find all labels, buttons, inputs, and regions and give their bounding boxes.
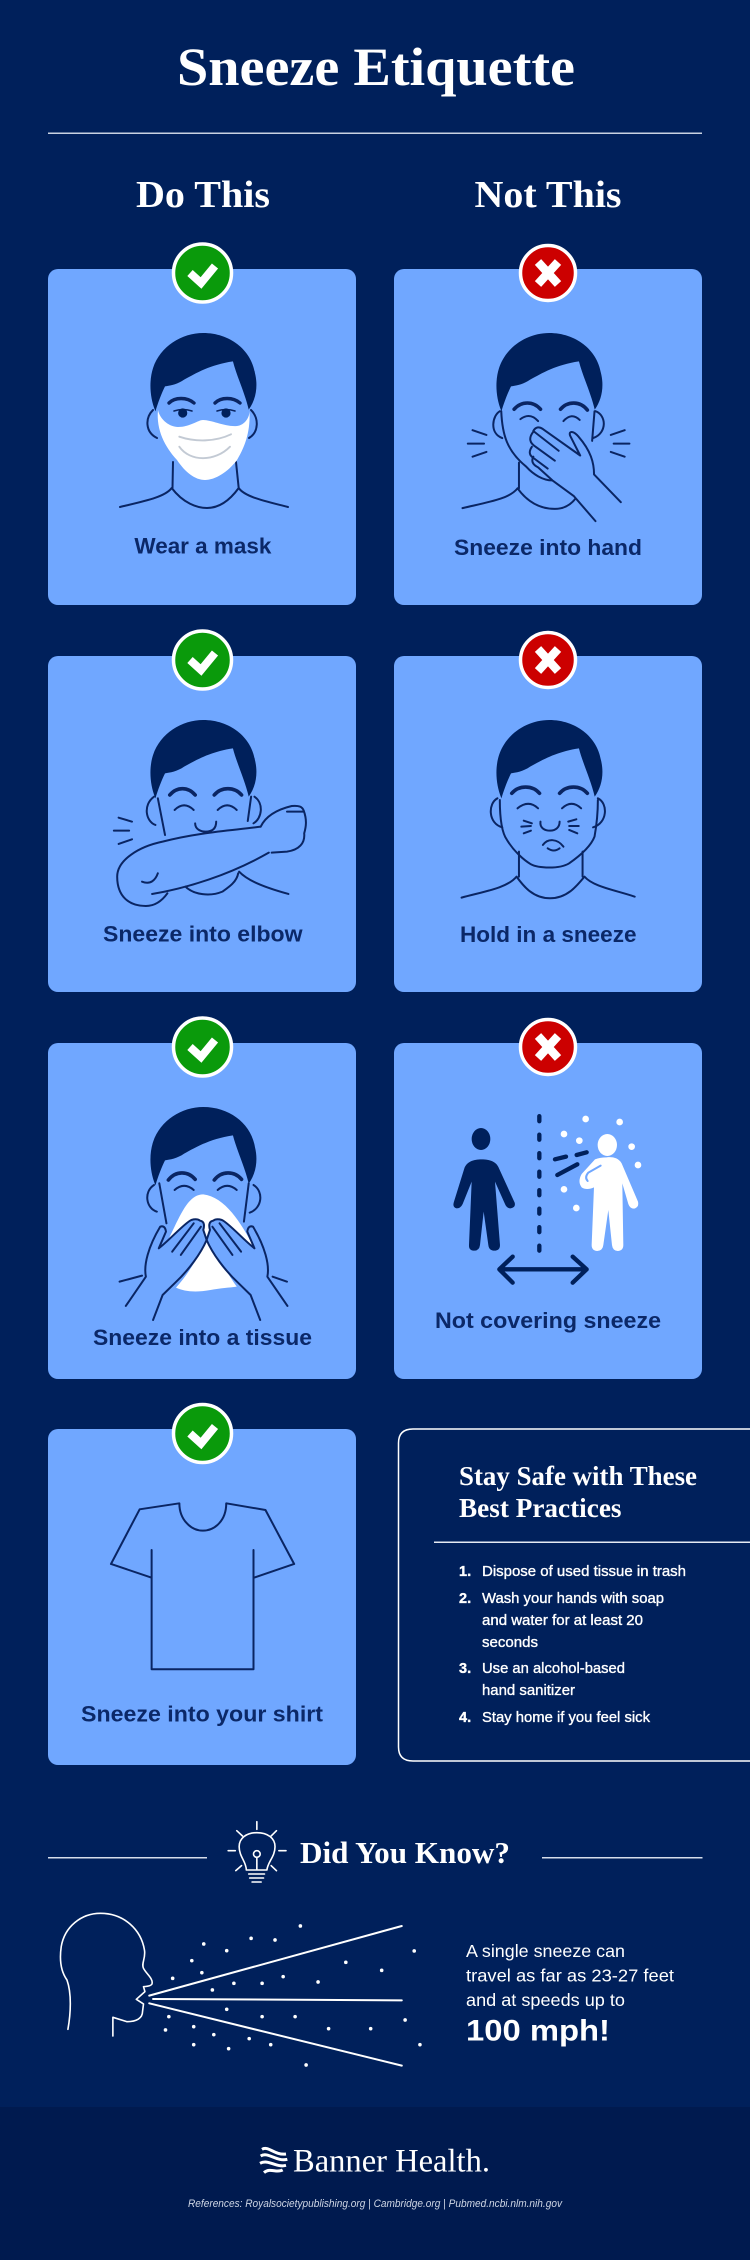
card background <box>48 1429 356 1765</box>
icon: red x badge <box>520 246 576 300</box>
illustration: people with spray and distance arrow <box>453 1116 638 1283</box>
panel: sneeze into a tissue <box>48 1018 356 1379</box>
label: Sneeze into a tissue <box>93 1325 312 1350</box>
card background <box>394 656 702 992</box>
arrow: double-headed distance <box>499 1257 587 1283</box>
card background <box>48 1043 356 1379</box>
spray lines <box>149 1926 402 2066</box>
heading <box>459 1461 697 1523</box>
droplets <box>564 1119 638 1208</box>
numbered list: seconds <box>482 1635 538 1651</box>
numbered list: Use an alcohol-based <box>482 1661 625 1677</box>
label: Wear a mask <box>134 534 272 558</box>
heading: Stay Safe with These <box>459 1461 697 1491</box>
panel: sneeze into your shirt <box>48 1404 356 1765</box>
illustration: man sneezing into hand <box>463 333 629 521</box>
numbered list: 3. <box>459 1661 471 1677</box>
illustration: t-shirt <box>111 1503 294 1669</box>
heading: Not This: Not This <box>474 174 622 216</box>
logo text: Banner Health. <box>293 2144 490 2180</box>
icon: green check badge <box>174 631 232 689</box>
numbered list: Wash your hands with soap <box>482 1591 664 1607</box>
numbered list: Dispose of used tissue in trash <box>482 1564 686 1580</box>
panel: wear a mask <box>48 244 356 605</box>
icon: red x badge <box>520 1020 576 1074</box>
card background <box>394 269 702 605</box>
numbered list <box>459 1564 686 1726</box>
panel: best practices <box>398 1429 750 1761</box>
illustration: man sneezing into elbow <box>114 720 306 906</box>
text: sneeze fact: 100 mph! <box>466 2014 610 2048</box>
numbered list: and water for at least 20 <box>482 1613 643 1629</box>
heading: Do This: Do This <box>136 174 270 216</box>
icon: light bulb <box>228 1822 286 1882</box>
illustration: sneeze spray from head profile <box>60 1913 420 2066</box>
text: sneeze fact <box>466 1941 674 2048</box>
heading: Best Practices <box>459 1493 622 1523</box>
icon: green check badge <box>174 1018 232 1076</box>
card background <box>48 656 356 992</box>
panel: hold in a sneeze <box>394 632 702 992</box>
dashed divider <box>533 1116 546 1251</box>
icon: dark person <box>453 1128 515 1251</box>
label: Sneeze into your shirt <box>81 1702 324 1726</box>
text: sneeze fact: A single sneeze can <box>466 1941 625 1961</box>
head profile <box>60 1913 152 2036</box>
spray lines <box>555 1152 587 1175</box>
label: Sneeze into hand <box>454 535 642 560</box>
label: Sneeze into elbow <box>103 922 303 946</box>
droplets <box>165 1926 420 2065</box>
panel: not covering sneeze <box>394 1020 702 1379</box>
card background <box>394 1043 702 1379</box>
logo: banner waves <box>260 2148 287 2173</box>
icon: red x badge <box>520 632 576 688</box>
text: sneeze fact: travel as far as 23-27 feet <box>466 1966 674 1986</box>
illustration: man holding in sneeze <box>462 720 635 898</box>
references: References: Royalsocietypublishing.org | Cambridge.org | Pubmed.ncbi.nlm.nih.gov <box>188 2198 563 2210</box>
panel outline <box>398 1429 750 1761</box>
text: sneeze fact: and at speeds up to <box>466 1990 625 2010</box>
footer <box>0 2107 750 2260</box>
panel: sneeze into hand <box>394 246 702 605</box>
numbered list: 1. <box>459 1564 471 1580</box>
label: Hold in a sneeze <box>460 922 636 947</box>
icon: green check badge <box>174 244 232 302</box>
icon: white sneezing person <box>579 1134 638 1251</box>
illustration: man sneezing into tissue <box>120 1107 287 1320</box>
heading: did you know: Did You Know? <box>300 1835 510 1870</box>
label: Not covering sneeze <box>435 1308 661 1333</box>
numbered list: 4. <box>459 1710 471 1726</box>
icon: green check badge <box>174 1404 232 1462</box>
card background <box>48 269 356 605</box>
numbered list: hand sanitizer <box>482 1683 575 1699</box>
numbered list: 2. <box>459 1591 471 1607</box>
illustration: man wearing mask <box>120 333 288 508</box>
title: Sneeze Etiquette <box>177 37 575 97</box>
numbered list: Stay home if you feel sick <box>482 1710 651 1726</box>
panel: sneeze into elbow <box>48 631 356 992</box>
